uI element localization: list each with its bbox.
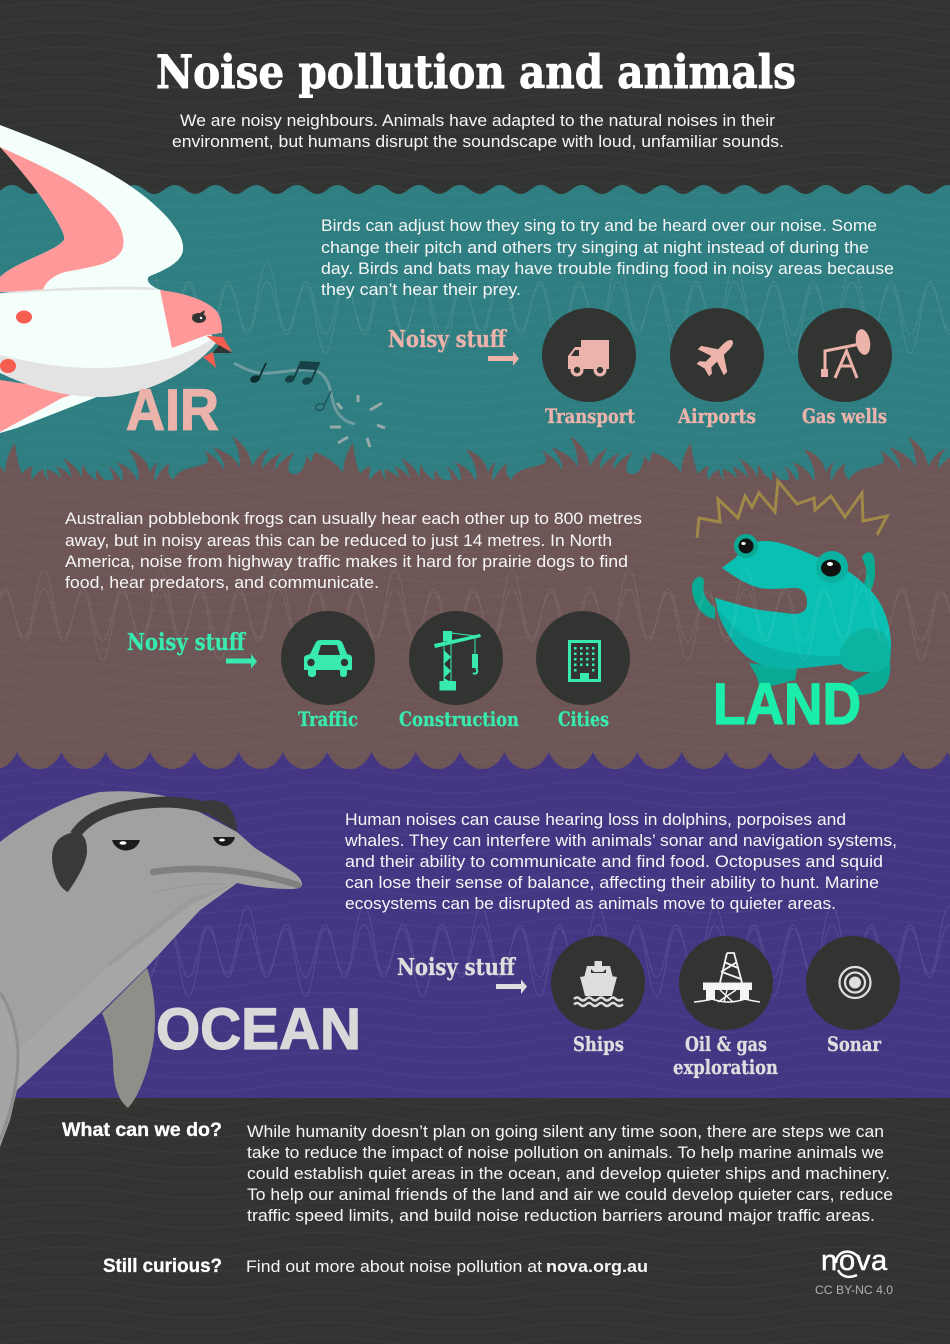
text: frogs: America, noise from highway traffic makes it hard for prairie dogs to find [65,552,628,571]
text: marine animals: ecosystems can be disrupted as animals move to quieter areas. [345,894,836,913]
panel: what can we do [62,1120,893,1297]
noisy stuff label and arrow [397,954,527,994]
icon: traffic [281,611,375,705]
text: marine animals: whales. They can interfere with animals’ sonar and navigation systems, [344,831,897,850]
noisy stuff label and arrow: Noisy stuff [127,629,247,656]
label: airports: Airports [677,404,756,428]
text: what can we do [247,1122,893,1225]
intro text: environment, but humans disrupt the soundscape with loud, unfamiliar sounds. [172,132,784,151]
text: birds: they can’t hear their prey. [321,280,521,299]
label: traffic: Traffic [298,707,358,731]
text: marine animals: Human noises can cause hearing loss in dolphins, porpoises and [345,810,846,829]
illustration: music notes and burst [234,362,385,447]
label: oil and gas exploration [673,1032,778,1079]
text: find out more: nova.org.au [546,1257,648,1276]
licence: CC BY-NC 4.0 [815,1283,893,1297]
illustration: frog [690,481,950,695]
text: birds: Birds can adjust how they sing to try and be heard over our noise. Some [321,216,877,235]
label: ships: Ships [573,1032,624,1056]
panel: ocean background [0,752,950,1098]
icon: transport [542,308,636,402]
text: frogs: food, hear predators, and communicate. [65,573,379,592]
panel: air [0,125,894,447]
panel: land background [0,436,950,770]
text: frogs: away, but in noisy areas this can be reduced to just 14 metres. In North [65,531,612,550]
text: what can we do: While humanity doesn’t plan on going silent any time soon, there are steps we can [247,1122,884,1141]
logo: nova: nova [821,1245,888,1277]
text: what can we do: To help our animal friends of the land and air we could develop quieter cars, reduce [247,1185,893,1204]
title: Noise pollution and animals [156,45,796,99]
text: what can we do: traffic speed limits, and build noise reduction barriers around major traffic areas. [247,1206,875,1225]
heading: still curious: Still curious? [103,1256,222,1277]
icon: airports [670,308,764,402]
icon: construction [409,611,503,705]
text: birds: day. Birds and bats may have trouble finding food in noisy areas because [321,259,894,278]
text: birds: change their pitch and others try singing at night instead of during the [321,238,869,257]
text: marine animals: and their ability to communicate and find food. Octopuses and squid [345,852,883,871]
intro text: We are noisy neighbours. Animals have adapted to the natural noises in their [180,111,775,130]
label: sonar: Sonar [827,1032,881,1056]
heading: air: AIR [126,378,219,443]
heading: land: LAND [713,672,861,737]
noisy stuff label and arrow [127,629,257,668]
panel: land [65,481,950,737]
illustration: dolphin with headphones [0,791,302,1147]
noisy stuff label and arrow [388,326,519,366]
label: cities: Cities [558,707,609,731]
icon: oil and gas exploration [679,936,773,1030]
icon: sonar [806,936,900,1030]
heading: what can we do: What can we do? [62,1120,222,1141]
icon: ships [551,936,645,1030]
text: frogs: Australian pobblebonk frogs can usually hear each other up to 800 metres [65,509,642,528]
label: construction: Construction [399,707,519,731]
noisy stuff label and arrow: Noisy stuff [397,954,517,981]
text: marine animals: can lose their sense of balance, affecting their ability to hunt. Marine [345,873,879,892]
text: birds [321,216,894,299]
panel: ocean [0,791,900,1147]
heading: ocean: OCEAN [156,997,361,1062]
label: oil and gas exploration: Oil & gas [685,1032,767,1056]
panel: air background [0,185,950,484]
label: transport: Transport [545,404,636,428]
text: find out more: Find out more about noise pollution at [246,1257,542,1276]
text: what can we do: take to reduce the impact of noise pollution on animals. To help marine animals we [247,1143,884,1162]
noisy stuff label and arrow: Noisy stuff [388,326,508,353]
text: frogs [65,509,642,592]
illustration: swallow bird [0,125,232,433]
label: oil and gas exploration: exploration [673,1055,778,1079]
intro text [172,111,784,151]
label: gas wells: Gas wells [802,404,887,428]
text: marine animals [344,810,897,913]
text: what can we do: could establish quiet areas in the ocean, and develop quieter ships and machinery. [247,1164,890,1183]
icon: gas wells [798,308,892,402]
icon: cities [536,611,630,705]
